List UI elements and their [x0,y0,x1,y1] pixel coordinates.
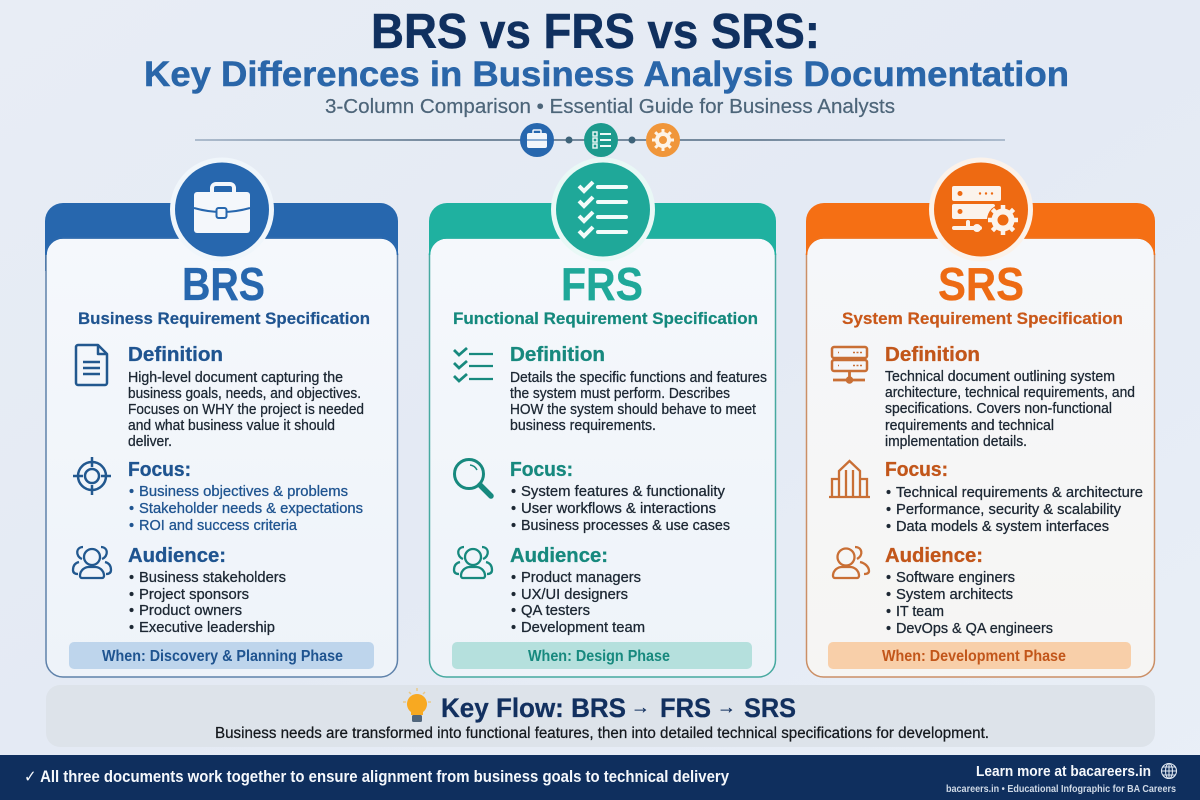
FRS focus: • [511,484,516,500]
SRS definition: implementation details. [885,434,1027,450]
BRS audience: • [129,587,134,603]
SRS audience: IT team [896,604,944,620]
FRS definition: HOW the system should behave to meet [510,402,756,418]
SRS card header band [806,203,1155,271]
FRS focus: User workflows & interactions [521,501,716,517]
key flow heading: → [717,697,736,717]
BRS card header band [45,203,398,271]
SRS focus: • [886,502,891,518]
BRS audience: Business stakeholders [139,570,286,586]
title: BRS vs FRS vs SRS: [371,5,820,59]
icon: globe [1162,764,1176,778]
FRS audience: • [511,603,516,619]
BRS card body [46,238,398,677]
SRS definition: architecture, technical requirements, and [885,385,1135,401]
BRS focus: Focus: [128,458,191,481]
panel: SRS [806,158,1155,677]
SRS audience: • [886,621,891,637]
BRS definition: business goals, needs, and objectives. [128,386,361,402]
BRS focus: Stakeholder needs & expectations [139,501,363,517]
SRS when badge: When: Development Phase [882,648,1066,665]
SRS focus: • [886,519,891,535]
BRS audience: • [129,570,134,586]
key flow heading: FRS [660,693,711,723]
SRS focus: Performance, security & scalability [896,502,1122,518]
BRS definition: High-level document capturing the [128,370,343,386]
FRS when badge [452,642,752,669]
SRS audience: Audience: [885,544,983,567]
BRS focus [128,458,363,534]
FRS definition: business requirements. [510,418,656,434]
footer message: ✓ All three documents work together to ensure alignment from business goals to technical delivery [24,768,730,786]
BRS audience: Product owners [139,603,242,619]
SRS focus: Focus: [885,458,948,481]
icon: document [76,345,107,385]
panel: key flow [46,685,1155,747]
icon: briefcase [170,158,274,262]
key flow heading [441,693,796,723]
FRS focus [510,458,730,534]
SRS when badge [828,642,1131,669]
SRS definition: requirements and technical [885,418,1054,434]
BRS focus: • [129,501,134,517]
BRS audience: Project sponsors [139,587,249,603]
panel: FRS [429,158,776,677]
FRS acronym: FRS [561,258,643,310]
SRS acronym: SRS [938,258,1024,310]
icon: server and gear [929,158,1033,262]
BRS definition: and what business value it should [128,418,335,434]
BRS definition: Definition [128,343,223,366]
icon: light bulb [403,688,431,722]
FRS audience [510,544,645,636]
BRS acronym: BRS [182,258,265,310]
BRS focus: • [129,518,134,534]
SRS definition: Definition [885,343,980,366]
FRS focus: • [511,518,516,534]
key flow heading: → [631,697,650,717]
subtitle: Key Differences in Business Analysis Documentation [144,55,1069,94]
SRS full name: System Requirement Specification [842,309,1123,328]
FRS card header band [429,203,776,271]
FRS focus: System features & functionality [521,484,726,500]
SRS audience: System architects [896,587,1013,603]
BRS when badge: When: Discovery & Planning Phase [102,648,343,665]
SRS focus: Technical requirements & architecture [896,485,1143,501]
BRS audience: Audience: [128,544,226,567]
icon: server [832,347,867,382]
FRS definition: Details the specific functions and features [510,370,767,386]
key flow heading: Key Flow: BRS [441,693,626,723]
SRS focus: • [886,485,891,501]
FRS audience: Development team [521,620,645,636]
BRS definition [128,343,364,450]
FRS audience: • [511,570,516,586]
icon: people [833,547,869,578]
SRS audience: • [886,604,891,620]
FRS when badge: When: Design Phase [528,648,670,665]
FRS focus: • [511,501,516,517]
BRS audience: • [129,620,134,636]
footer bar [0,755,1200,800]
BRS definition: deliver. [128,434,172,450]
SRS audience: • [886,587,891,603]
FRS focus: Business processes & use cases [521,518,730,534]
BRS full name: Business Requirement Specification [78,309,370,328]
BRS focus: ROI and success criteria [139,518,298,534]
BRS when badge [69,642,374,669]
icon: task list [454,348,493,381]
FRS audience: Product managers [521,570,641,586]
BRS focus: • [129,484,134,500]
tagline: 3-Column Comparison • Essential Guide for Business Analysts [325,96,895,118]
icon: people [73,547,111,578]
FRS definition [510,343,767,434]
FRS focus: Focus: [510,458,573,481]
icon: target [73,457,111,495]
FRS audience: • [511,620,516,636]
BRS audience: Executive leadership [139,620,275,636]
FRS audience: UX/UI designers [521,587,628,603]
footer link: Learn more at bacareers.in [976,763,1151,780]
panel: BRS [45,158,398,677]
SRS audience: • [886,570,891,586]
SRS audience [885,544,1053,637]
SRS focus [885,458,1143,535]
FRS audience: QA testers [521,603,590,619]
SRS definition [885,343,1135,450]
BRS definition: Focuses on WHY the project is needed [128,402,364,418]
icon: checklist [551,158,655,262]
SRS audience: Software enginers [896,570,1015,586]
key flow heading: SRS [744,693,796,723]
icon: building [829,461,870,497]
FRS full name: Functional Requirement Specification [453,309,758,328]
icon: people [454,547,492,578]
SRS audience: DevOps & QA engineers [896,621,1053,637]
FRS definition: the system must perform. Describes [510,386,730,402]
FRS audience: Audience: [510,544,608,567]
FRS card body [430,238,776,677]
SRS definition: Technical document outlining system [885,369,1115,385]
BRS audience [128,544,286,636]
SRS focus: Data models & system interfaces [896,519,1109,535]
SRS definition: specifications. Covers non-functional [885,401,1112,417]
divider with icons [195,123,1005,157]
key flow description: Business needs are transformed into functional features, then into detailed technical specifications for development. [215,725,989,742]
icon: magnifier [454,460,491,496]
BRS audience: • [129,603,134,619]
FRS audience: • [511,587,516,603]
SRS card body [806,238,1154,677]
FRS definition: Definition [510,343,605,366]
BRS focus: Business objectives & problems [139,484,348,500]
